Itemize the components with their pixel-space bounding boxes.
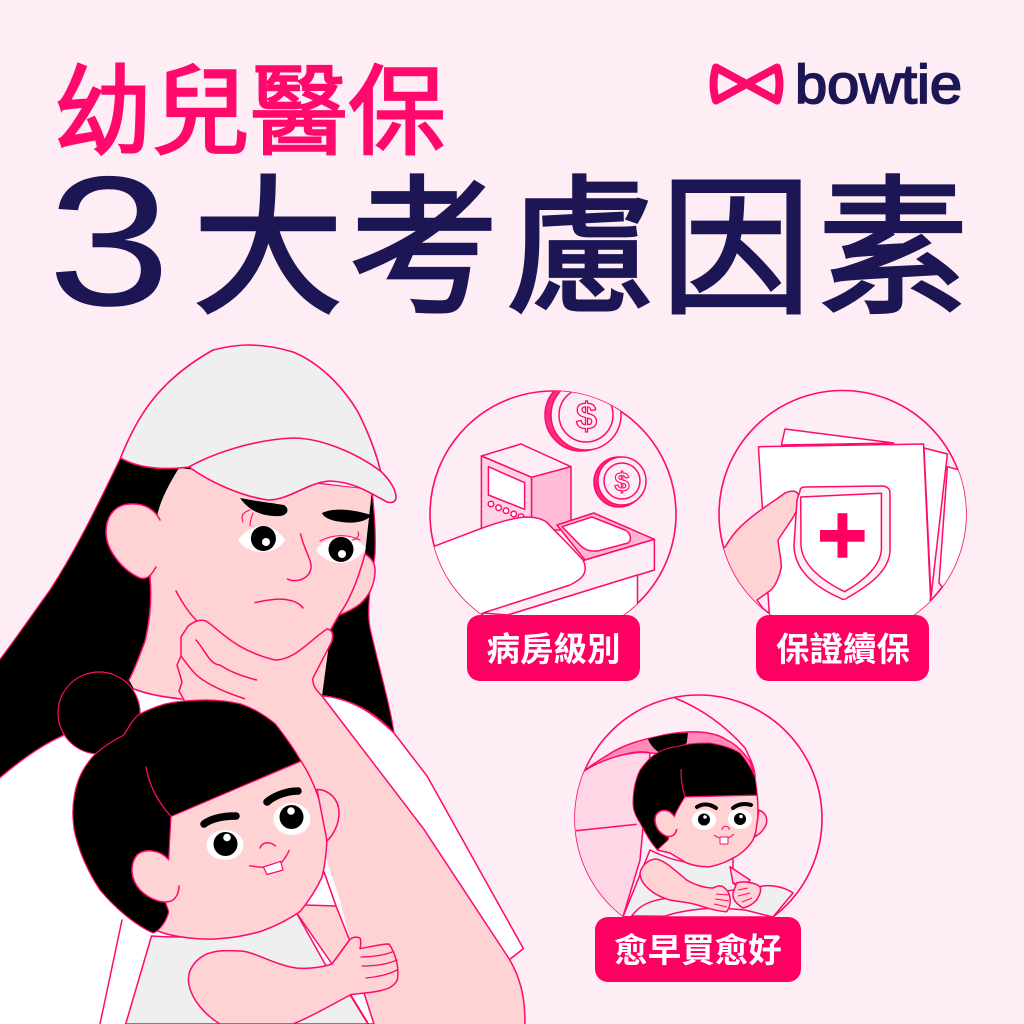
- label: 病房級別: 病房級別: [486, 632, 620, 669]
- baby arm: [640, 859, 730, 912]
- seat bun: [648, 733, 688, 753]
- label: 病房級別: [467, 615, 640, 681]
- mother body: white top: [0, 689, 525, 1024]
- baby right hand: [733, 882, 761, 908]
- coin: large: $: [576, 396, 597, 438]
- mother nose and mouth: [255, 534, 311, 608]
- mother eyebrows: [240, 498, 371, 523]
- white top side line: [100, 920, 122, 1024]
- mother hair: [0, 458, 394, 782]
- baby nose and mouth: [250, 843, 289, 874]
- title: navy line: 大考慮因素: [193, 165, 968, 333]
- shield: [794, 486, 890, 600]
- logo: bowtie: bowtie: [795, 53, 962, 115]
- illustration: mother and baby: [0, 345, 525, 1024]
- baby collar: [305, 872, 336, 906]
- baby left eye: [206, 830, 244, 860]
- strap: [730, 867, 750, 886]
- label: 愈早買愈好: [595, 917, 801, 982]
- medical cross: [820, 513, 865, 558]
- baby far arm: [296, 872, 350, 964]
- baby bun: [58, 672, 140, 754]
- coin: large: [544, 391, 622, 452]
- mother left eye: [238, 510, 285, 552]
- baby shirt: [126, 912, 368, 1024]
- baby right eye: [274, 803, 310, 835]
- label: 保證續保: [756, 615, 929, 681]
- mother right eye: [316, 532, 366, 563]
- title: navy line: 3: [47, 138, 171, 345]
- baby head: [633, 743, 767, 867]
- title: pink line: 幼兒醫保: [54, 57, 446, 167]
- circle outline: [575, 695, 822, 942]
- logo: bowtie: [714, 53, 962, 115]
- title: navy line: [47, 138, 968, 345]
- baby near arm and hand: [188, 937, 398, 1024]
- baby right ear: [317, 789, 339, 841]
- baby stroller: [575, 698, 756, 916]
- medical monitor: [481, 444, 571, 530]
- document stack: [758, 428, 966, 615]
- baby strap: [349, 990, 374, 1024]
- label: 保證續保: 保證續保: [776, 632, 910, 669]
- circle outline: [719, 390, 966, 638]
- hand: [724, 490, 798, 608]
- panel: buy early: [560, 695, 822, 982]
- hospital bed: [434, 512, 656, 615]
- mother arm and hand: [177, 620, 525, 1024]
- coin: small: $: [614, 467, 630, 497]
- baby left ear: [132, 851, 179, 902]
- tray: [632, 886, 793, 917]
- coin: small: [594, 457, 646, 507]
- label: 愈早買愈好: 愈早買愈好: [614, 933, 782, 970]
- circle outline: [430, 391, 676, 637]
- baby hair: [73, 700, 301, 933]
- baby eyebrows: [204, 791, 298, 824]
- baby shirt: [622, 849, 736, 917]
- mother right ear: [339, 554, 375, 615]
- panel: room class: [420, 379, 676, 681]
- baby face: [150, 761, 327, 939]
- panel: guaranteed renewal: [700, 390, 970, 681]
- mother left ear: [106, 504, 160, 578]
- mother face: [129, 468, 372, 699]
- mother cap: [120, 345, 396, 502]
